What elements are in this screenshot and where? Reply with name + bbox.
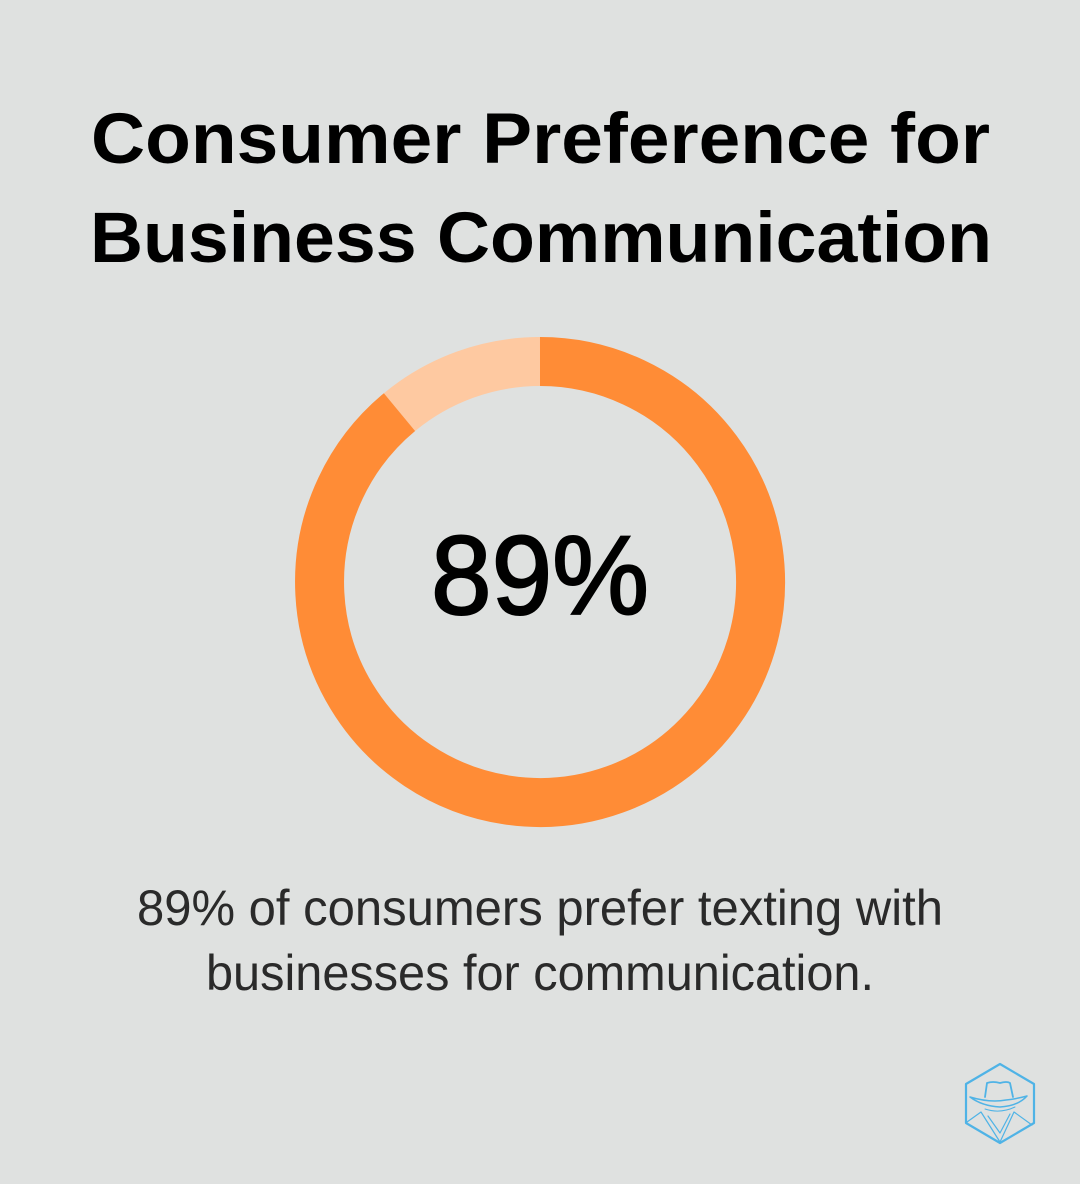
title: Business Communication: [90, 199, 992, 278]
title: [90, 100, 992, 278]
center percentage: 89%: [431, 513, 649, 638]
remaining 11% segment: [400, 362, 540, 412]
title: Consumer Preference for: [91, 100, 990, 179]
donut chart: 89%: [320, 362, 761, 802]
hat brim: [970, 1096, 1027, 1107]
description text: businesses for communication.: [206, 945, 874, 1001]
hat crown: [985, 1082, 1013, 1097]
collar: [967, 1112, 1032, 1142]
89% segment: [320, 362, 761, 802]
icon: hexagon logo with hat: [966, 1064, 1034, 1143]
description text: 89% of consumers prefer texting with: [137, 880, 943, 936]
description text: [137, 880, 943, 1001]
hexagon outline: [966, 1064, 1034, 1143]
face shadow: [985, 1107, 1015, 1111]
